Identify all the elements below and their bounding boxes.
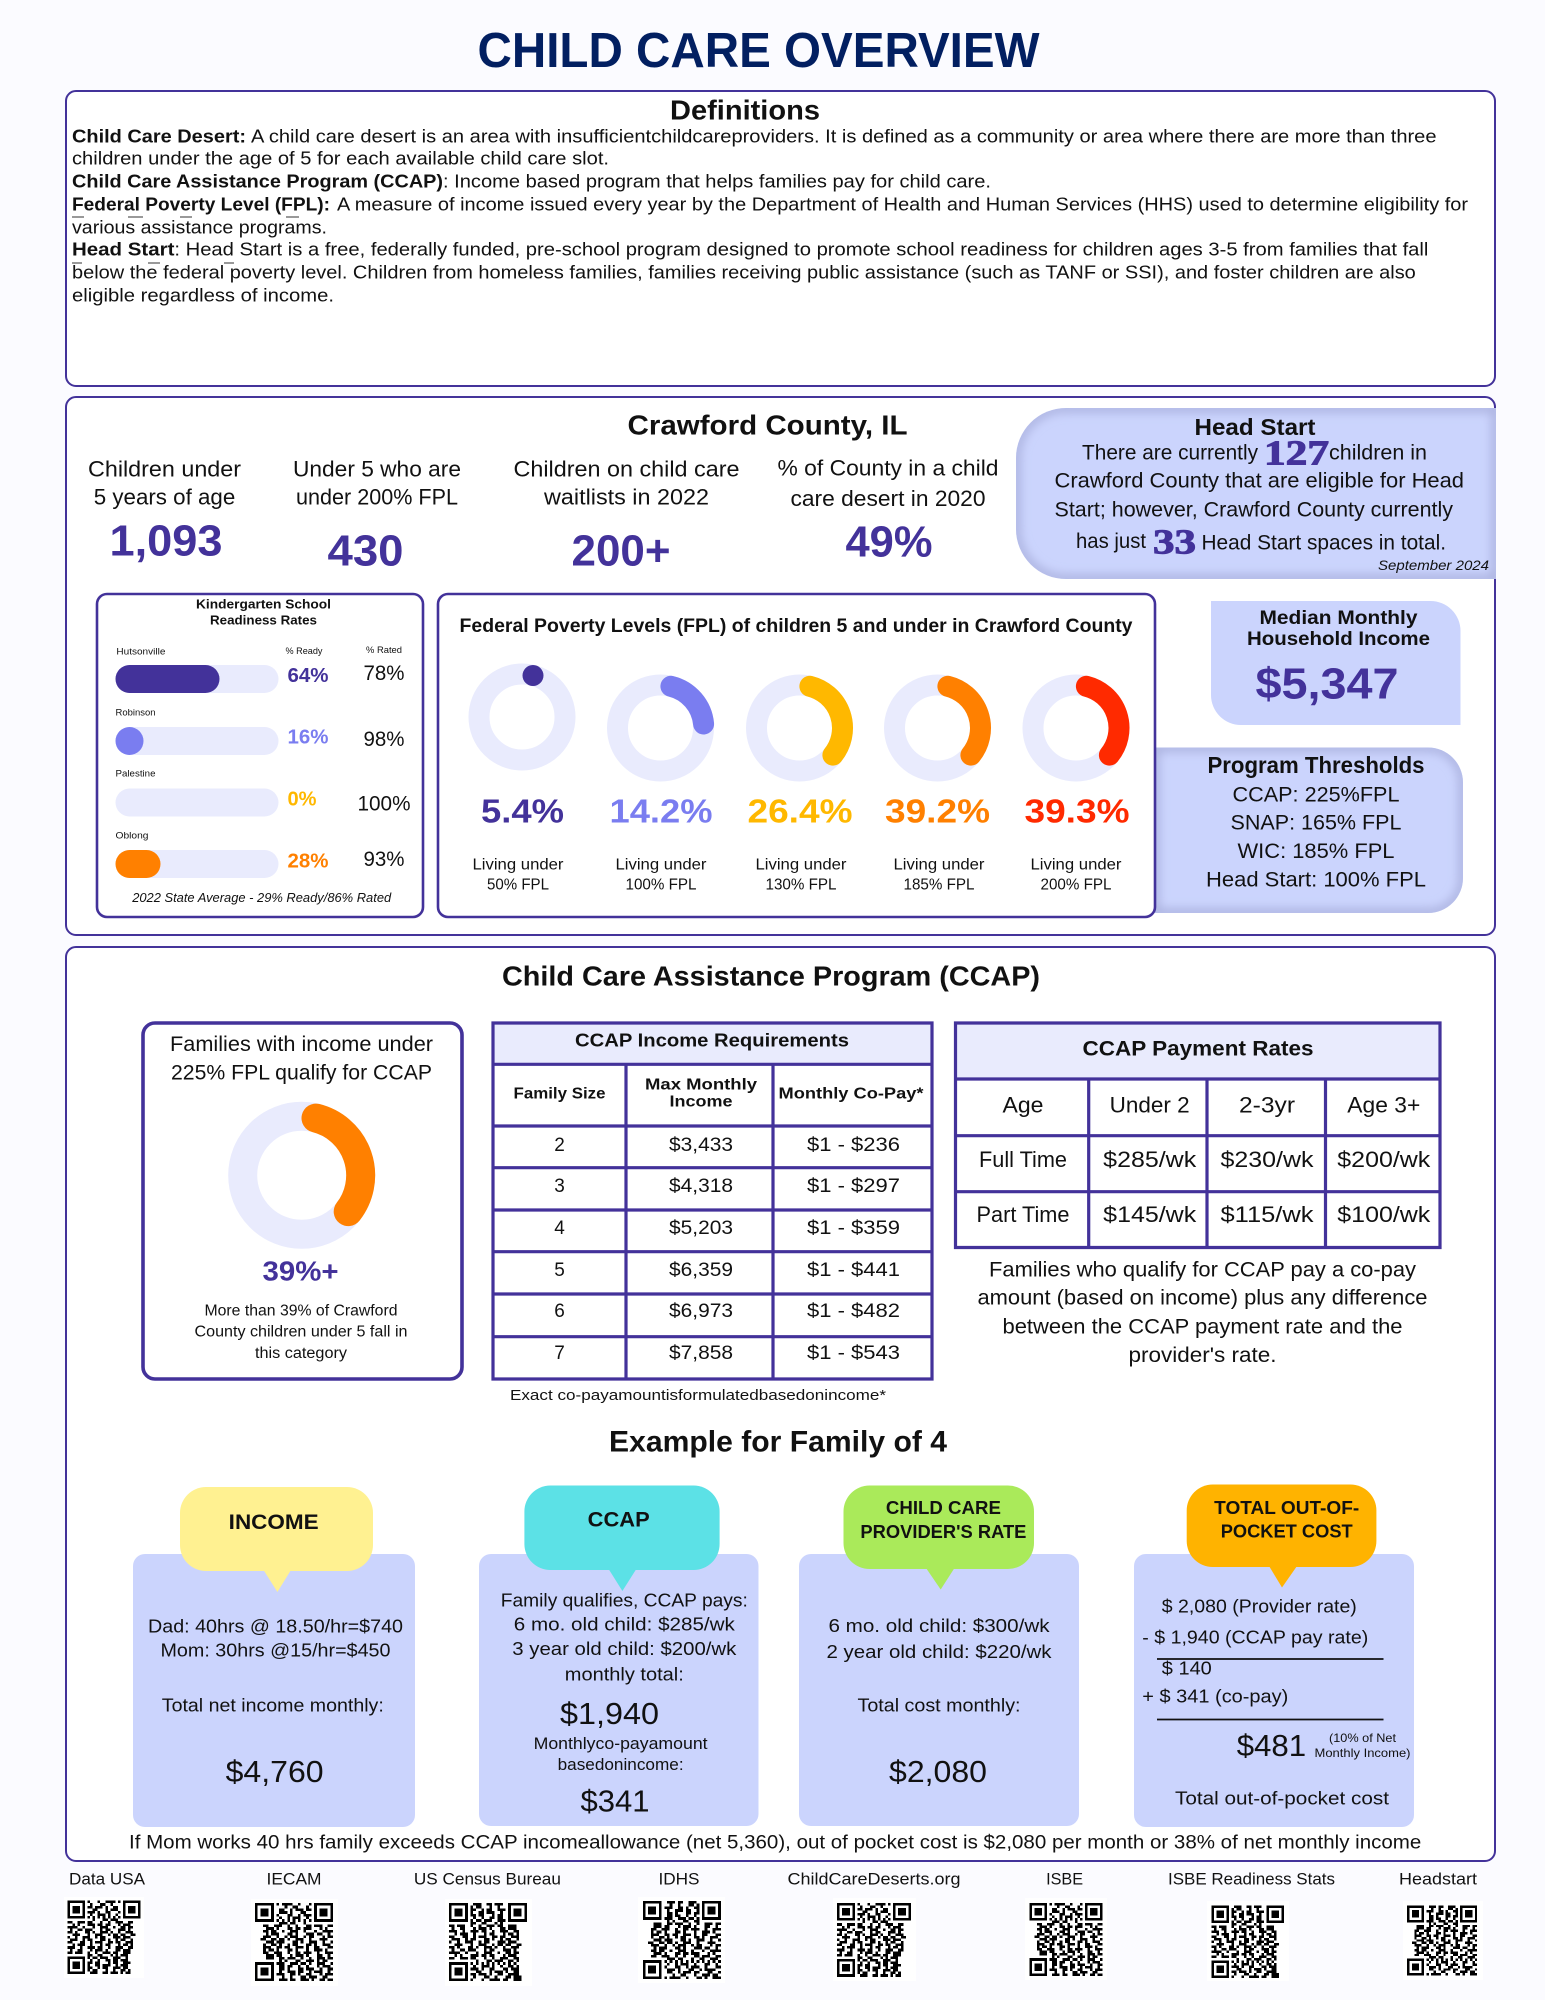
donut: 39.2%: 39.2% xyxy=(885,792,990,830)
definition: head start: eligible regardless of income. xyxy=(72,284,334,306)
card: income xyxy=(133,1487,415,1827)
box: program thresholds: SNAP: 165% FPL xyxy=(1230,812,1402,834)
box: median monthly household income: Household Income xyxy=(1247,628,1430,650)
card: income: Dad: 40hrs @ 18.50/hr=$740 xyxy=(148,1616,403,1636)
bar: Hutsonville: 64% xyxy=(288,665,329,687)
table: CCAP income requirements: $4,318 xyxy=(669,1176,733,1197)
bar: Robinson: Robinson xyxy=(116,708,156,718)
stat: child care desert: care desert in 2020 xyxy=(790,486,986,511)
panel: CCAP xyxy=(66,947,1495,1861)
text block: co-pay explanation: Families who qualify for CCAP pay a co-pay xyxy=(989,1258,1417,1282)
bar: Palestine xyxy=(116,768,410,816)
stat: waitlists: 200+ xyxy=(572,526,670,576)
table: CCAP income requirements: $5,203 xyxy=(669,1218,733,1239)
text block: co-pay explanation: amount (based on income) plus any difference xyxy=(978,1286,1428,1310)
card: total out-of-pocket cost xyxy=(1134,1484,1414,1827)
card: CCAP: Monthlyco-payamount xyxy=(534,1735,708,1753)
table: CCAP payment rates: Age xyxy=(1002,1092,1044,1118)
card: families qualifying for CCAP xyxy=(143,1023,462,1379)
source: Headstart: Headstart xyxy=(1399,1870,1477,1888)
table: CCAP income requirements: 6 xyxy=(554,1301,565,1322)
heading: Crawford County: Crawford County, IL xyxy=(628,410,908,440)
card: income: INCOME xyxy=(229,1511,319,1534)
table: CCAP payment rates: $145/wk xyxy=(1103,1202,1197,1227)
card: CCAP: monthly total: xyxy=(565,1664,684,1684)
panel: kindergarten school readiness rates: % Ready xyxy=(286,646,323,656)
card: total out-of-pocket cost: (10% of Net xyxy=(1329,1731,1397,1745)
donut: 26.4%: 26.4% xyxy=(748,792,852,830)
card: total out-of-pocket cost: TOTAL OUT-OF- xyxy=(1214,1497,1359,1518)
heading: example for family of 4: Example for Family of 4 xyxy=(609,1426,947,1458)
stat: children under 5: Children under xyxy=(88,456,242,482)
table: CCAP income requirements: $3,433 xyxy=(669,1135,733,1156)
card: total out-of-pocket cost: $ 140 xyxy=(1162,1658,1212,1678)
bar: Oblong xyxy=(116,830,404,878)
source: ISBE Readiness Stats: ISBE Readiness Stats xyxy=(1168,1870,1335,1888)
source: Data USA xyxy=(64,1870,146,1978)
source: US Census Bureau: US Census Bureau xyxy=(414,1870,561,1888)
donut: 5.4% xyxy=(472,665,565,894)
donut: 14.2%: Living under xyxy=(616,856,706,874)
bar: Robinson: 16% xyxy=(288,726,329,748)
panel: federal poverty levels xyxy=(438,594,1155,917)
callout: head start: children in xyxy=(1329,442,1427,464)
donut: 5.4%: 5.4% xyxy=(481,792,564,830)
card: income: Total net income monthly: xyxy=(162,1694,384,1716)
card: income: Mom: 30hrs @15/hr=$450 xyxy=(160,1640,390,1660)
table: CCAP income requirements: 7 xyxy=(554,1343,565,1364)
definition: federal poverty level xyxy=(72,194,1468,238)
bar: Hutsonville: Hutsonville xyxy=(116,646,165,658)
card: total out-of-pocket cost: $ 2,080 (Provider rate) xyxy=(1162,1596,1357,1616)
panel: kindergarten school readiness rates: Readiness Rates xyxy=(210,612,317,628)
bar: Oblong: 93% xyxy=(364,848,404,871)
source: IDHS: IDHS xyxy=(658,1870,700,1888)
card: families qualifying for CCAP: this category xyxy=(255,1345,347,1362)
definition: child care desert: children under the age of 5 for each available child care slot. xyxy=(72,148,609,168)
stat: children under 5 xyxy=(88,456,242,566)
table: CCAP income requirements: $1 - $297 xyxy=(807,1176,900,1197)
panel: federal poverty levels: Federal Poverty Levels (FPL) of children 5 and under in Crawford County xyxy=(460,616,1133,637)
table: CCAP income requirements: Income xyxy=(670,1094,733,1110)
source: IDHS xyxy=(638,1870,725,1983)
card: child care provider's rate: 6 mo. old child: $300/wk xyxy=(828,1615,1050,1636)
table: CCAP income requirements: Max Monthly xyxy=(645,1076,757,1094)
stat: waitlists: waitlists in 2022 xyxy=(543,484,709,510)
panel: kindergarten school readiness rates: % Rated xyxy=(366,645,402,655)
box: program thresholds: WIC: 185% FPL xyxy=(1238,840,1394,863)
callout: head start: September 2024 xyxy=(1378,557,1489,573)
donut: 39.2%: 185% FPL xyxy=(904,876,975,894)
card: child care provider's rate: CHILD CARE xyxy=(886,1497,1001,1518)
stat: children under 5: 1,093 xyxy=(110,516,222,566)
bar: Hutsonville xyxy=(116,646,404,693)
stat: children under 5: 5 years of age xyxy=(94,484,235,510)
card: child care provider's rate: PROVIDER'S RATE xyxy=(860,1521,1026,1542)
donut: 39.2% xyxy=(885,685,990,894)
card: CCAP: $341 xyxy=(580,1784,650,1818)
donut: 39.3% xyxy=(1024,685,1130,894)
card: total out-of-pocket cost: POCKET COST xyxy=(1221,1520,1353,1542)
card: total out-of-pocket cost: + $ 341 (co-pay) xyxy=(1142,1686,1288,1706)
table: CCAP income requirements: 2 xyxy=(554,1135,565,1156)
panel: Crawford County xyxy=(66,397,1496,935)
source: IECAM xyxy=(251,1870,338,1986)
table: CCAP income requirements: Monthly Co-Pay* xyxy=(778,1086,925,1102)
table: CCAP payment rates: $285/wk xyxy=(1103,1147,1197,1172)
table: CCAP income requirements: 4 xyxy=(554,1218,565,1239)
callout: head start: 127 xyxy=(1264,434,1329,472)
panel: kindergarten school readiness rates xyxy=(97,594,423,917)
table: CCAP income requirements: 3 xyxy=(554,1176,565,1197)
table: CCAP income requirements: $1 - $236 xyxy=(807,1135,900,1156)
card: income: $4,760 xyxy=(226,1754,324,1789)
card: CCAP: 6 mo. old child: $285/wk xyxy=(514,1614,736,1634)
card: CCAP: basedonincome: xyxy=(558,1756,684,1774)
card: CCAP: CCAP xyxy=(588,1508,650,1532)
callout: head start xyxy=(1016,408,1496,579)
table: CCAP income requirements: 5 xyxy=(554,1260,565,1281)
stat: under 200% FPL: 430 xyxy=(328,526,404,576)
table: CCAP payment rates: $230/wk xyxy=(1220,1147,1315,1172)
card: CCAP: $1,940 xyxy=(560,1696,659,1731)
card: total out-of-pocket cost: Total out-of-pocket cost xyxy=(1175,1788,1389,1808)
definition: CCAP: : Income based program that helps families pay for child care. xyxy=(443,170,991,192)
stat: under 200% FPL: Under 5 who are xyxy=(293,456,461,482)
source: Data USA: Data USA xyxy=(69,1870,146,1888)
table: CCAP payment rates: $200/wk xyxy=(1337,1147,1431,1172)
definition: federal poverty level: Federal Poverty Level (FPL): xyxy=(72,194,330,214)
source: US Census Bureau xyxy=(414,1870,561,1986)
definition: federal poverty level: A measure of income issued every year by the Department of Health and Human Services (HHS) used to determine eligibility for xyxy=(337,194,1468,214)
table: CCAP income requirements: $1 - $359 xyxy=(807,1218,900,1239)
callout: head start: Crawford County that are eligible for Head xyxy=(1054,470,1464,492)
table: CCAP payment rates: $100/wk xyxy=(1337,1202,1431,1227)
bar: Palestine: Palestine xyxy=(116,768,156,780)
text: mom works 40 hours note: If Mom works 40 hrs family exceeds CCAP incomeallowance (net 5,360), out of pocket cost is $2,080 per month or 38% of net monthly income xyxy=(129,1832,1421,1854)
donut: 26.4%: 130% FPL xyxy=(766,876,837,894)
callout: head start: Start; however, Crawford County currently xyxy=(1054,498,1454,522)
donut: 5.4%: Living under xyxy=(472,856,564,874)
table: CCAP income requirements: $1 - $543 xyxy=(807,1343,900,1364)
card: families qualifying for CCAP: County children under 5 fall in xyxy=(194,1324,408,1340)
bar: Oblong: Oblong xyxy=(116,830,148,842)
source: Headstart xyxy=(1399,1870,1483,1980)
donut: 39.3%: 200% FPL xyxy=(1040,876,1112,894)
definition: federal poverty level: various assistance programs. xyxy=(72,216,327,238)
table: CCAP payment rates: Full Time xyxy=(979,1147,1067,1172)
table: CCAP payment rates: $115/wk xyxy=(1220,1202,1315,1227)
stat: child care desert xyxy=(778,456,998,566)
table: CCAP payment rates: Under 2 xyxy=(1110,1092,1190,1118)
box: program thresholds: Head Start: 100% FPL xyxy=(1206,868,1426,892)
definition: child care desert: A child care desert is an area with insufficientchildcareproviders. It is defined as a community or area where there are more than three xyxy=(251,126,1436,146)
card: child care provider's rate: $2,080 xyxy=(889,1754,987,1789)
table: CCAP payment rates: CCAP Payment Rates xyxy=(1082,1038,1314,1060)
table: CCAP income requirements: CCAP Income Requirements xyxy=(575,1030,849,1050)
stat: child care desert: % of County in a child xyxy=(778,456,998,480)
source: ISBE Readiness Stats xyxy=(1168,1870,1335,1981)
panel: kindergarten school readiness rates: Kindergarten School xyxy=(196,596,331,612)
card: total out-of-pocket cost: $481 xyxy=(1237,1728,1306,1763)
donut: 14.2% xyxy=(610,685,712,894)
text block: co-pay explanation: between the CCAP payment rate and the xyxy=(1002,1316,1402,1338)
card: families qualifying for CCAP: 225% FPL qualify for CCAP xyxy=(171,1062,432,1084)
box: program thresholds: CCAP: 225%FPL xyxy=(1232,784,1400,806)
card: families qualifying for CCAP: Families with income under xyxy=(170,1033,433,1056)
donut: 39.3%: 39.3% xyxy=(1024,792,1130,830)
text block: co-pay explanation xyxy=(978,1258,1428,1367)
table: CCAP payment rates: 2-3yr xyxy=(1239,1092,1295,1118)
box: median monthly household income: Median Monthly xyxy=(1260,607,1418,629)
table: CCAP payment rates: Part Time xyxy=(976,1202,1070,1227)
callout: head start: 33 xyxy=(1153,522,1196,562)
box: median monthly household income xyxy=(1211,601,1460,725)
heading: definitions: Definitions xyxy=(670,94,820,126)
definition: head start: below the federal poverty level. Children from homeless families, families receiving public assistance (such as TANF or SSI), and foster children are also xyxy=(72,262,1416,282)
card: child care provider's rate: Total cost monthly: xyxy=(858,1694,1020,1716)
bar: Robinson: 98% xyxy=(364,728,404,751)
box: median monthly household income: $5,347 xyxy=(1256,660,1398,708)
card: total out-of-pocket cost: Monthly Income) xyxy=(1314,1746,1410,1760)
stat: waitlists: Children on child care xyxy=(514,456,740,482)
definition: CCAP xyxy=(72,170,991,192)
bar: Palestine: 100% xyxy=(358,792,410,816)
stat: under 200% FPL xyxy=(293,456,461,576)
table: CCAP income requirements: $1 - $441 xyxy=(807,1260,900,1281)
bar: Robinson xyxy=(116,708,404,755)
table: CCAP income requirements: $7,858 xyxy=(669,1343,733,1364)
table: CCAP income requirements: $6,359 xyxy=(669,1260,733,1281)
card: CCAP: 3 year old child: $200/wk xyxy=(512,1638,737,1659)
text block: co-pay explanation: provider's rate. xyxy=(1128,1344,1276,1367)
card: child care provider's rate: 2 year old child: $220/wk xyxy=(826,1641,1052,1662)
donut: 39% xyxy=(243,1116,361,1234)
donut: 26.4% xyxy=(748,685,852,894)
title: CHILD CARE OVERVIEW xyxy=(478,24,1040,78)
note: exact co-pay: Exact co-payamountisformulatedbasedonincome* xyxy=(510,1387,886,1404)
bar: Oblong: 28% xyxy=(288,850,329,872)
box: program thresholds: Program Thresholds xyxy=(1208,752,1424,778)
callout: head start: There are currently xyxy=(1082,442,1258,464)
card: child care provider's rate xyxy=(799,1486,1079,1826)
stat: waitlists xyxy=(514,456,740,576)
donut: 14.2%: 100% FPL xyxy=(626,876,697,894)
callout: head start: Head Start spaces in total. xyxy=(1202,532,1446,554)
table: CCAP income requirements: Family Size xyxy=(514,1086,606,1102)
table: CCAP income requirements: $1 - $482 xyxy=(807,1301,900,1322)
callout: head start: Head Start xyxy=(1194,414,1316,440)
definition: CCAP: Child Care Assistance Program (CCAP) xyxy=(72,170,443,192)
table: CCAP income requirements: $6,973 xyxy=(669,1301,733,1322)
source: ChildCareDeserts.org: ChildCareDeserts.org xyxy=(788,1870,960,1888)
table: CCAP payment rates xyxy=(956,1023,1440,1248)
stat: under 200% FPL: under 200% FPL xyxy=(296,484,458,510)
donut: 5.4%: 50% FPL xyxy=(487,876,549,894)
bar: Palestine: 0% xyxy=(288,788,317,810)
bar: Hutsonville: 78% xyxy=(364,662,404,685)
table: CCAP income requirements xyxy=(493,1023,932,1379)
source: ISBE xyxy=(1025,1870,1107,1980)
heading: CCAP: Child Care Assistance Program (CCAP) xyxy=(502,960,1040,992)
card: total out-of-pocket cost: - $ 1,940 (CCAP pay rate) xyxy=(1142,1626,1368,1648)
card: CCAP: Family qualifies, CCAP pays: xyxy=(501,1590,748,1610)
panel: definitions xyxy=(66,91,1495,386)
source: ChildCareDeserts.org xyxy=(788,1870,960,1981)
donut: 14.2%: 14.2% xyxy=(610,792,712,830)
definition: child care desert: Child Care Desert: xyxy=(72,126,246,146)
card: CCAP xyxy=(479,1486,758,1826)
donut: 26.4%: Living under xyxy=(756,856,846,874)
table: CCAP payment rates: Age 3+ xyxy=(1347,1092,1420,1118)
card: families qualifying for CCAP: More than 39% of Crawford xyxy=(204,1302,398,1320)
source: ISBE: ISBE xyxy=(1046,1870,1083,1888)
definition: child care desert xyxy=(72,126,1436,168)
box: program thresholds xyxy=(1155,748,1463,913)
note: state average: 2022 State Average - 29% Ready/86% Rated xyxy=(131,890,392,905)
callout: head start: has just xyxy=(1076,530,1146,553)
definition: head start xyxy=(72,238,1428,306)
card: families qualifying for CCAP: 39%+ xyxy=(262,1256,338,1286)
definition: head start: : Head Start is a free, federally funded, pre-school program designed to promote school readiness for children ages 3-5 from families that fall xyxy=(174,238,1428,260)
source: IECAM: IECAM xyxy=(266,1870,322,1888)
stat: child care desert: 49% xyxy=(846,518,932,566)
definition: head start: Head Start xyxy=(72,238,174,260)
donut: 39.3%: Living under xyxy=(1030,856,1122,874)
donut: 39.2%: Living under xyxy=(894,856,984,874)
